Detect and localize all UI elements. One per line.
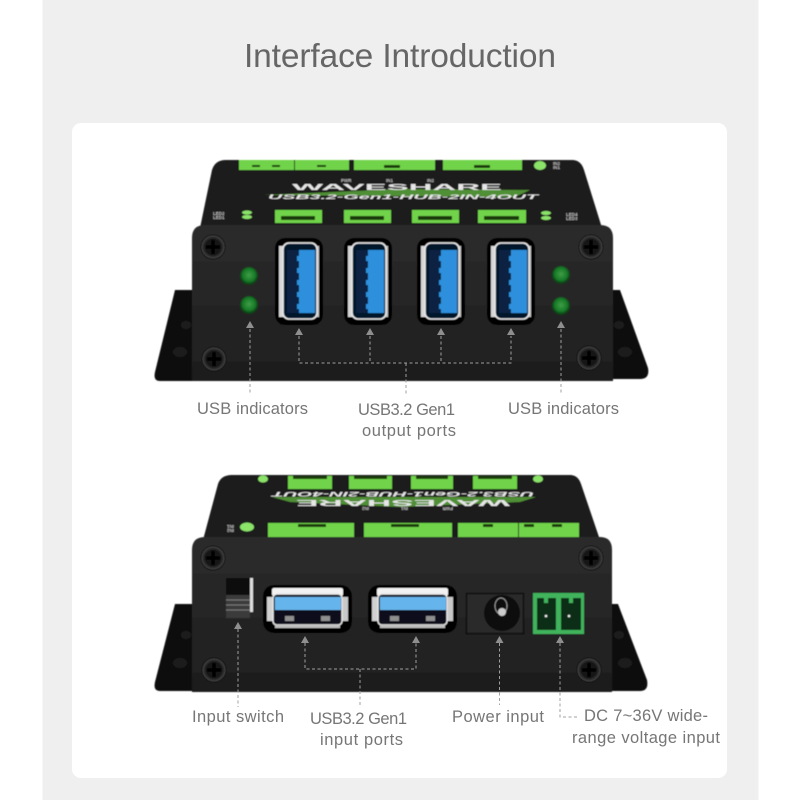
top face of hub — [200, 160, 602, 228]
label: input switch: Input switch — [192, 708, 284, 726]
top face of hub: LED4 — [566, 212, 578, 217]
top face of hub: IN2 — [427, 178, 434, 183]
arrows: input side callouts — [234, 622, 578, 717]
label: left USB indicators: USB indicators — [197, 400, 308, 418]
top face of hub: LED1 — [213, 215, 225, 220]
power input jack — [466, 594, 524, 634]
screws — [200, 546, 604, 682]
label: USB3.2 Gen1 output ports: USB3.2 Gen1 — [358, 401, 455, 419]
top face of hub: IN1 — [400, 506, 408, 511]
USB3.2 input ports — [263, 585, 457, 633]
arrows: output side callouts — [246, 321, 565, 395]
label: DC voltage input — [572, 707, 720, 747]
top face of hub: LED3 — [566, 216, 578, 221]
label: USB3.2 Gen1 output ports — [358, 401, 456, 440]
label: DC voltage input: range voltage input — [572, 729, 720, 747]
label: DC voltage input: DC 7~36V wide- — [584, 707, 708, 725]
DC terminal block — [533, 593, 584, 634]
front face of hub — [192, 537, 612, 692]
top face of hub: USB3.2-Gen1-HUB-2IN-4OUT — [268, 194, 541, 201]
input switch — [226, 578, 253, 618]
top face of hub: PWR — [341, 178, 352, 183]
label: USB3.2 Gen1 input ports: USB3.2 Gen1 — [310, 710, 407, 728]
mounting flanges — [155, 290, 648, 381]
top face of hub: WAVESHARE — [293, 498, 510, 507]
top face of hub: USB3.2-Gen1-HUB-2IN-4OUT — [269, 490, 534, 497]
front face of hub — [192, 225, 613, 381]
USB3.2 output ports — [275, 238, 535, 325]
top face of hub — [203, 475, 600, 540]
device: USB input side — [155, 475, 647, 692]
top face of hub: LED2 — [213, 211, 225, 216]
label: power input: Power input — [452, 708, 544, 726]
label: right USB indicators: USB indicators — [508, 400, 619, 418]
screws — [200, 234, 604, 372]
top face of hub: IN2 — [226, 528, 234, 533]
top face of hub: WAVESHARE — [292, 183, 505, 192]
top face of hub: IN2 — [553, 161, 560, 166]
USB indicator LEDs — [240, 266, 570, 315]
top face of hub: IN1 — [226, 524, 234, 529]
top face of hub: PWR — [442, 506, 453, 511]
device: USB output side — [155, 160, 648, 381]
top face of hub: IN2 — [362, 506, 369, 511]
label: USB3.2 Gen1 input ports — [310, 710, 407, 749]
label: USB3.2 Gen1 output ports: output ports — [362, 422, 456, 440]
mounting flanges — [155, 604, 647, 691]
label: USB3.2 Gen1 input ports: input ports — [320, 731, 403, 749]
top face of hub: IN1 — [553, 165, 560, 170]
title: Interface Introduction — [244, 38, 556, 75]
top face of hub: IN1 — [386, 178, 394, 183]
panel: interface card — [72, 123, 727, 778]
